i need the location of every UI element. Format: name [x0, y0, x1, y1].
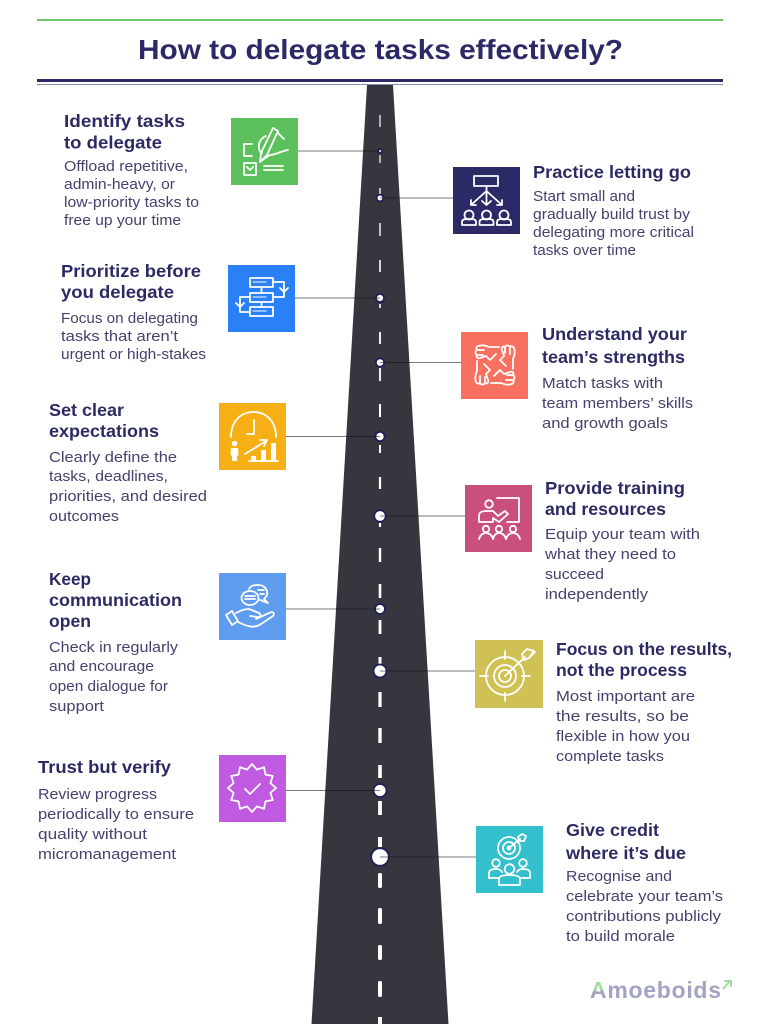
description	[544, 526, 700, 603]
description: priorities, and desired	[49, 488, 207, 505]
heading: Set clear	[49, 400, 124, 420]
logo: Amoeboids: Amoeboids	[590, 977, 721, 1003]
description: Most important are	[556, 688, 695, 705]
description: Focus on delegating	[61, 310, 198, 327]
description: flexible in how you	[556, 728, 690, 745]
heading	[49, 569, 182, 631]
heading	[64, 111, 185, 152]
icon: verified badge	[219, 755, 286, 822]
description: free up your time	[64, 212, 181, 229]
heading	[565, 820, 686, 863]
step: Give credit where it's due	[371, 820, 723, 945]
icon: presenter with audience	[465, 485, 532, 552]
icon: clock, person and growth chart	[219, 403, 286, 470]
description: delegating more critical	[533, 224, 694, 241]
icon: flowchart	[228, 265, 295, 332]
description: the results, so be	[556, 708, 689, 725]
heading	[542, 324, 687, 367]
description: tasks that aren’t	[61, 328, 179, 345]
description: contributions publicly	[566, 908, 722, 925]
icon: target with arrow	[475, 640, 543, 708]
heading: Trust but verify	[38, 757, 171, 777]
description: quality without	[38, 826, 148, 843]
description	[556, 688, 695, 765]
heading: Give credit	[566, 820, 659, 840]
step: Identify tasks to delegate	[64, 111, 382, 229]
heading: Identify tasks	[64, 111, 185, 131]
step: Practice letting go	[377, 162, 694, 259]
description: succeed	[545, 566, 604, 583]
step: Keep communication open	[49, 569, 385, 715]
description: team members’ skills	[542, 395, 693, 412]
description: to build morale	[566, 928, 675, 945]
description: Equip your team with	[545, 526, 700, 543]
description: Review progress	[38, 786, 157, 803]
description: gradually build trust by	[533, 206, 691, 223]
heading: communication	[49, 590, 182, 610]
heading: you delegate	[61, 282, 174, 302]
description	[38, 786, 194, 863]
icon: hierarchy	[453, 167, 520, 234]
description: Start small and	[533, 188, 635, 205]
description	[566, 868, 723, 945]
step: Understand your team's strengths	[376, 324, 693, 432]
description: what they need to	[544, 546, 676, 563]
heading: Provide training	[545, 478, 685, 498]
description	[49, 449, 207, 525]
description: periodically to ensure	[38, 806, 194, 823]
road	[312, 85, 448, 1024]
heading: open	[49, 611, 91, 631]
description: micromanagement	[38, 846, 177, 863]
step: Prioritize before you delegate	[61, 261, 384, 363]
title: How to delegate tasks effectively?	[138, 34, 623, 65]
description	[64, 158, 199, 229]
heading: expectations	[49, 421, 159, 441]
heading: team’s strengths	[542, 347, 685, 367]
header	[37, 19, 723, 85]
heading: Keep	[49, 569, 91, 589]
icon: checklist with pen	[231, 118, 298, 185]
icon: team around a target	[476, 826, 543, 893]
step: Set clear expectations	[49, 400, 385, 525]
description: open dialogue for	[49, 678, 168, 695]
description: Match tasks with	[542, 375, 663, 392]
heading: Understand your	[542, 324, 687, 344]
heading: to delegate	[64, 132, 162, 152]
heading: Practice letting go	[533, 162, 691, 182]
description: complete tasks	[556, 748, 664, 765]
description: independently	[545, 586, 649, 603]
heading	[556, 639, 732, 680]
description: support	[49, 698, 105, 715]
description: tasks over time	[533, 242, 636, 259]
description	[533, 188, 694, 259]
description: admin-heavy, or	[64, 176, 175, 193]
description	[61, 310, 206, 363]
heading	[61, 261, 201, 302]
description	[49, 639, 179, 715]
description: celebrate your team’s	[566, 888, 723, 905]
step: Trust but verify	[38, 755, 386, 863]
heading: Prioritize before	[61, 261, 201, 281]
description: urgent or high-stakes	[61, 346, 206, 363]
step: Provide training and resources	[374, 478, 700, 603]
description: Clearly define the	[49, 449, 177, 466]
step: Focus on the results, not the process	[374, 639, 732, 765]
icon: hand with speech bubbles	[219, 573, 286, 640]
description: and growth goals	[542, 415, 668, 432]
description: outcomes	[49, 508, 119, 525]
description: Check in regularly	[49, 639, 179, 656]
heading	[545, 478, 685, 519]
heading: where it’s due	[565, 843, 686, 863]
description: Offload repetitive,	[64, 158, 188, 175]
description: tasks, deadlines,	[49, 468, 168, 485]
heading: Focus on the results,	[556, 639, 732, 659]
heading	[49, 400, 159, 441]
heading: not the process	[556, 660, 687, 680]
description: and encourage	[49, 658, 154, 675]
icon: four linked hands	[461, 332, 528, 399]
heading: and resources	[545, 499, 666, 519]
description	[542, 375, 693, 432]
description: Recognise and	[566, 868, 672, 885]
description: low-priority tasks to	[64, 194, 199, 211]
